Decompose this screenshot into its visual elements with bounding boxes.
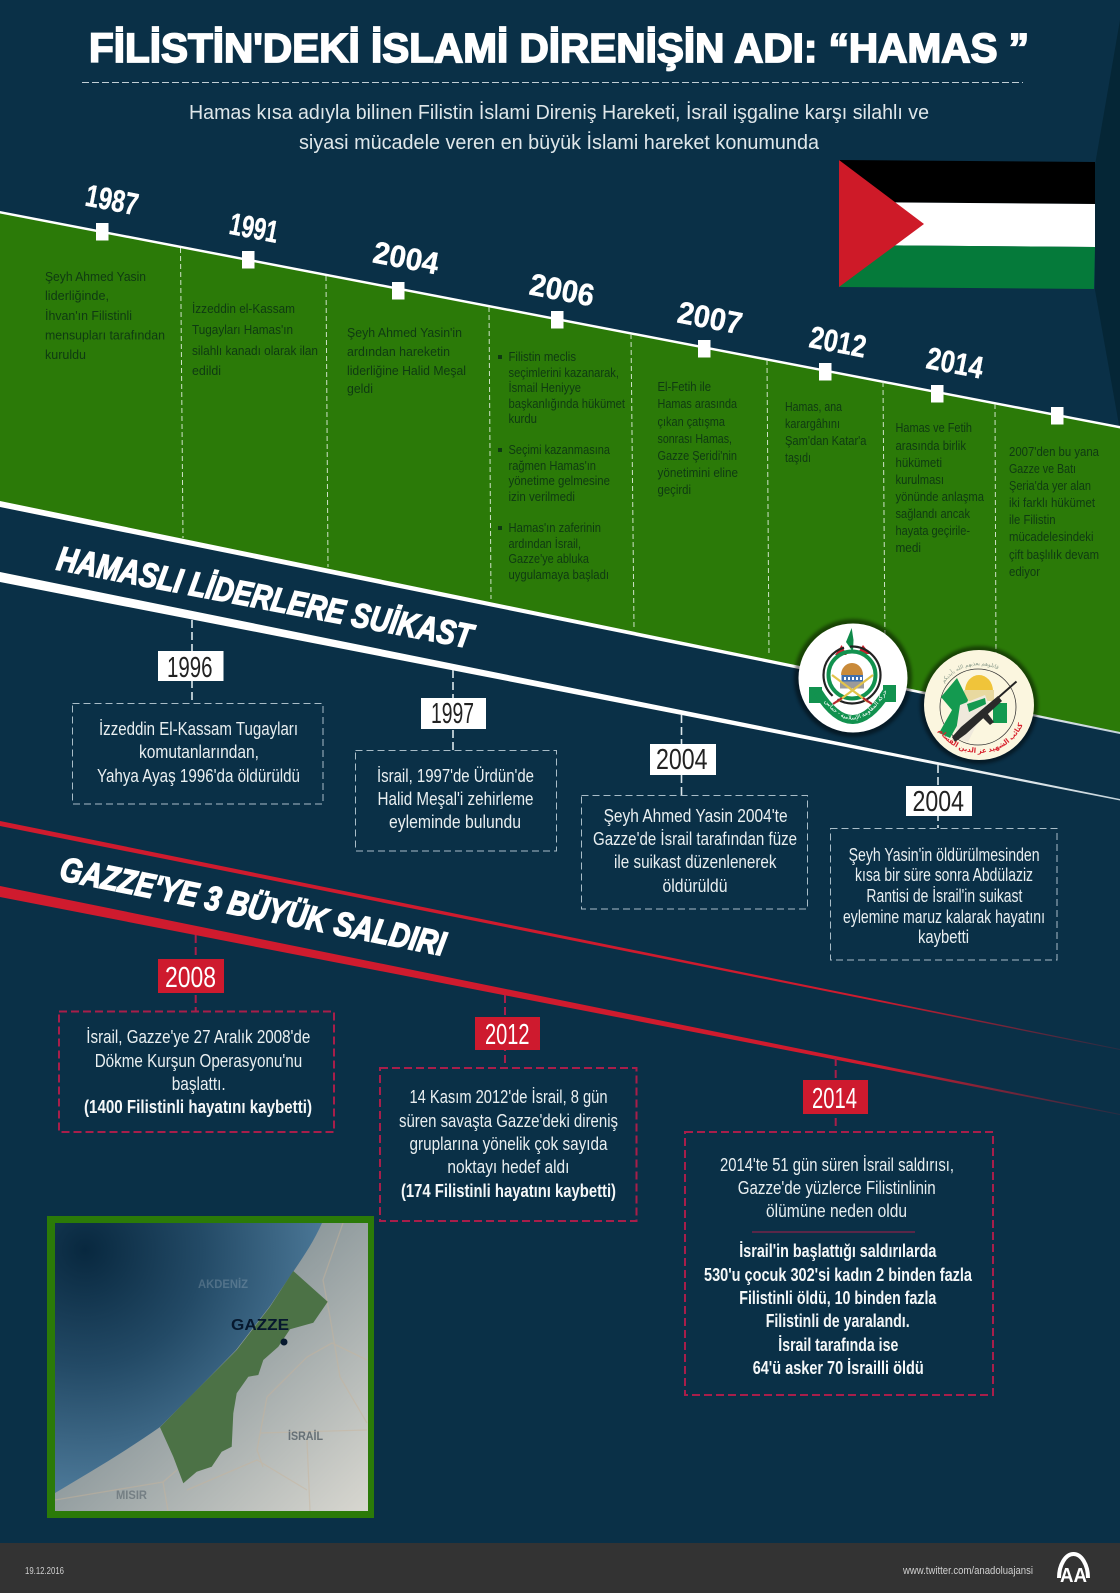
text: 1991: İzzeddin el-Kassam — [192, 301, 295, 316]
text: 2006 bullets: Gazze'ye abluka — [508, 552, 589, 566]
text: 2012: Hamas, ana — [785, 400, 842, 414]
text: 2007: El-Fetih ile — [658, 380, 711, 394]
attack item: 2014 — [685, 1058, 993, 1395]
text: 2006 bullets: seçimlerini kazanarak, — [508, 366, 619, 380]
heading: Gaza attacks: GAZZE'YE 3 BÜYÜK SALDIRI — [57, 850, 450, 964]
assassination item: 2004 Rantisi: 2004 — [912, 786, 964, 818]
assassination item: 2004 Yasin — [582, 715, 808, 909]
footer: www.twitter.com/anadoluajansi — [902, 1565, 1033, 1577]
text: 2007: sonrası Hamas, — [658, 432, 732, 446]
assassination item: 1997: Halid Meşal'i zehirleme — [378, 789, 534, 809]
text: 1991: silahlı kanadı olarak ilan — [192, 343, 318, 358]
timeline years — [83, 178, 987, 386]
attack item: 2014: ölümüne neden oldu — [766, 1201, 907, 1221]
assassination item: 1996: İzzeddin El-Kassam Tugayları — [99, 719, 298, 739]
subtitle: siyasi mücadele veren en büyük İslami hareket konumunda — [299, 131, 820, 154]
text: 1987: liderliğinde, — [45, 288, 109, 303]
text: final note: 2007'den bu yana — [1009, 445, 1099, 459]
map labels: İSRAİL — [288, 1430, 323, 1443]
text: 2014: kurulması — [896, 473, 944, 487]
heading: assassinations: HAMASLI LİDERLERE SUİKAST — [54, 540, 478, 657]
text: 2006 bullets: Filistin meclis — [508, 350, 576, 364]
attack item: 2012: 2012 — [485, 1019, 530, 1051]
text: 1991: Tugayları Hamas'ın — [192, 322, 293, 337]
text: 2006 bullets: Seçimi kazanmasına — [508, 443, 610, 457]
assassination item: 2004 Rantisi: kaybetti — [918, 927, 969, 947]
attack item: 2012: gruplarına yönelik çok sayıda — [410, 1134, 608, 1154]
text: 2006 bullets: ardından İsrail, — [508, 537, 581, 551]
text: 1987 — [45, 269, 165, 362]
text: 2004: liderliğine Halid Meşal — [347, 363, 466, 378]
assassination item: 1996 — [72, 620, 323, 804]
text: 2014 — [896, 421, 984, 555]
text: 2014: hayata geçirile- — [896, 524, 970, 538]
text: final note: ediyor — [1009, 565, 1040, 579]
text: 2007: Gazze Şeridi'nin — [658, 449, 737, 463]
timeline years: 2012 — [807, 319, 869, 365]
text: final note: çift başlılık devam — [1009, 548, 1099, 562]
text: 1991: edildi — [192, 363, 221, 378]
text: 2006 bullets: yönetime gelmesine — [508, 474, 610, 488]
assassination item: 1996: komutanlarından, — [139, 742, 259, 762]
map labels: AKDENİZ — [198, 1278, 248, 1291]
map: Gaza — [47, 1216, 374, 1518]
text: 2012: Şam'dan Katar'a — [785, 434, 867, 448]
text: 2007: çıkan çatışma — [658, 415, 725, 429]
map labels: MISIR — [116, 1490, 148, 1502]
text: 2006 bullets: rağmen Hamas'ın — [508, 459, 596, 473]
text: 2006 bullets — [498, 350, 625, 582]
footer — [0, 1543, 1120, 1593]
attack item: 2008: başlattı. — [172, 1074, 226, 1094]
emblem: Hamas logo: حركة المقاومة الإسلامية - حماس — [824, 690, 886, 721]
timeline years: 1991 — [227, 206, 281, 250]
assassination item: 1996: Yahya Ayaş 1996'da öldürüldü — [97, 766, 300, 786]
assassination item: 2004 Yasin: ile suikast düzenlenerek — [614, 852, 777, 872]
text: 2012: taşıdı — [785, 451, 811, 465]
text: 1987: İhvan'ın Filistinli — [45, 308, 132, 323]
text: 2004: Şeyh Ahmed Yasin'in — [347, 325, 462, 340]
attack item: 2014: Filistinli öldü, 10 binden fazla — [739, 1288, 937, 1308]
text: 2006 bullets: İsmail Heniyye — [508, 381, 581, 395]
assassination item: 2004 Rantisi: kısa bir süre sonra Abdülaziz — [855, 865, 1033, 885]
icon: AA logo: AA — [1060, 1565, 1087, 1587]
text: 2007 — [658, 380, 738, 497]
text: 2006 bullets: uygulamaya başladı — [508, 568, 609, 582]
text: final note: Şeria'da yer alan — [1009, 479, 1091, 493]
attack item: 2012: (174 Filistinli hayatını kaybetti) — [401, 1181, 616, 1201]
timeline years: 2004 — [370, 235, 442, 282]
attack item: 2008 — [59, 935, 334, 1132]
attack item: 2008: İsrail, Gazze'ye 27 Aralık 2008'de — [86, 1027, 310, 1047]
assassination item: 2004 Rantisi: Rantisi de İsrail'in suikast — [866, 886, 1022, 906]
text: 2014: Hamas ve Fetih — [896, 421, 972, 435]
text: 2004: geldi — [347, 381, 373, 396]
icon: AA logo — [1059, 1554, 1088, 1587]
attack item: 2014: İsrail tarafında ise — [778, 1335, 898, 1355]
attack item: 2012 — [380, 995, 636, 1221]
text: 1987: kuruldu — [45, 347, 86, 362]
attack item: 2008: Dökme Kurşun Operasyonu'nu — [95, 1051, 302, 1071]
timeline years: 2006 — [527, 267, 597, 313]
text: final note: mücadelesindeki — [1009, 530, 1094, 544]
attack item: 2012: noktayı hedef aldı — [447, 1157, 569, 1177]
red diagonal lines — [0, 821, 1120, 1115]
text: final note: iki farklı hükümet — [1009, 496, 1095, 510]
timeline markers — [96, 223, 1064, 424]
text: 2014: yönünde anlaşma — [896, 490, 984, 504]
right side shadow — [1095, 20, 1120, 425]
panel: green timeline band — [0, 178, 1120, 734]
timeline years: 2014 — [924, 340, 987, 386]
assassination item: 2004 Yasin: 2004 — [656, 744, 708, 776]
text: 2006 bullets: Hamas'ın zaferinin — [508, 521, 601, 535]
text: 2007: Hamas arasında — [658, 397, 737, 411]
attack item: 2014: Gazze'de yüzlerce Filistinlinin — [738, 1178, 936, 1198]
subtitle — [189, 101, 929, 154]
text: 2006 bullets: kurdu — [508, 412, 537, 426]
map labels — [116, 1278, 323, 1502]
attack item: 2008: (1400 Filistinli hayatını kaybetti) — [84, 1097, 312, 1117]
assassination item: 1997 — [356, 670, 556, 851]
text: 2004: ardından hareketin — [347, 344, 450, 359]
assassination item: 2004 Rantisi: eylemine maruz kalarak hayatını — [843, 907, 1045, 927]
emblem: Qassam Brigades logo: قاتلوهم يعذبهم الله بأيديكم — [944, 662, 999, 684]
attack item: 2014: 530'u çocuk 302'si kadın 2 binden fazla — [704, 1265, 973, 1285]
attack item: 2008: 2008 — [165, 962, 216, 994]
text: 2014: arasında birlik — [896, 439, 967, 453]
attack item: 2014: 2014'te 51 gün süren İsrail saldırısı, — [720, 1155, 954, 1175]
text: 2012 — [785, 400, 867, 465]
text: final note: ile Filistin — [1009, 513, 1056, 527]
assassination item: 2004 Rantisi: Şeyh Yasin'in öldürülmesinden — [849, 845, 1040, 865]
text: 2014: medi — [896, 541, 921, 555]
emblem: Hamas logo — [792, 618, 914, 738]
text: 2007: yönetimini eline — [658, 466, 738, 480]
assassination item: 1997: eyleminde bulundu — [389, 812, 521, 832]
white diagonal line — [0, 572, 1120, 800]
assassination item: 1997: İsrail, 1997'de Ürdün'de — [377, 766, 534, 786]
emblem: Qassam Brigades logo: كتائب الشهيد عز الدين القسام — [937, 722, 1022, 755]
emblem: Qassam Brigades logo — [919, 644, 1040, 765]
footer: 19.12.2016 — [25, 1566, 64, 1577]
assassination item: 2004 Yasin: Şeyh Ahmed Yasin 2004'te — [604, 806, 788, 826]
text: final note: Gazze ve Batı — [1009, 462, 1076, 476]
text: final note — [1009, 445, 1099, 579]
icon: Palestinian flag — [839, 160, 1095, 289]
assassination item: 1996: 1996 — [167, 652, 212, 684]
attack item: 2014: Filistinli de yaralandı. — [766, 1311, 910, 1331]
map labels: GAZZE — [231, 1317, 289, 1334]
assassination item: 1997: 1997 — [431, 698, 474, 730]
text: 2006 bullets: başkanlığında hükümet — [508, 397, 625, 411]
text: 1987: mensupları tarafından — [45, 328, 165, 342]
timeline years: 1987 — [83, 178, 141, 222]
text: 2007: geçirdi — [658, 483, 691, 497]
subtitle: Hamas kısa adıyla bilinen Filistin İslami Direniş Hareketi, İsrail işgaline karşı silahlı ve — [189, 101, 929, 124]
assassination item: 2004 Yasin: Gazze'de İsrail tarafından füze — [593, 829, 797, 849]
text: 2014: sağlandı ancak — [896, 507, 971, 521]
text: 2004 — [347, 325, 466, 396]
text: 1987: Şeyh Ahmed Yasin — [45, 269, 146, 284]
text: 1991 — [192, 301, 318, 378]
assassination item: 2004 Yasin: öldürüldü — [662, 876, 728, 896]
timeline years: 2007 — [675, 295, 745, 341]
title: FİLİSTİN'DEKİ İSLAMİ DİRENİŞİN ADI: “HAMAS ” — [89, 25, 1029, 71]
attack item: 2014: İsrail'in başlattığı saldırılarda — [739, 1241, 937, 1261]
attack item: 2012: süren savaşta Gazze'deki direniş — [399, 1111, 618, 1131]
text: 2014: hükümeti — [896, 456, 942, 470]
text: 2012: karargâhını — [785, 417, 840, 431]
attack item: 2014: 64'ü asker 70 İsrailli öldü — [753, 1358, 924, 1378]
assassination item: 2004 Rantisi — [830, 765, 1057, 960]
text: 2006 bullets: izin verilmedi — [508, 490, 575, 504]
attack item: 2012: 14 Kasım 2012'de İsrail, 8 gün — [410, 1087, 608, 1107]
attack item: 2014: 2014 — [812, 1083, 857, 1115]
